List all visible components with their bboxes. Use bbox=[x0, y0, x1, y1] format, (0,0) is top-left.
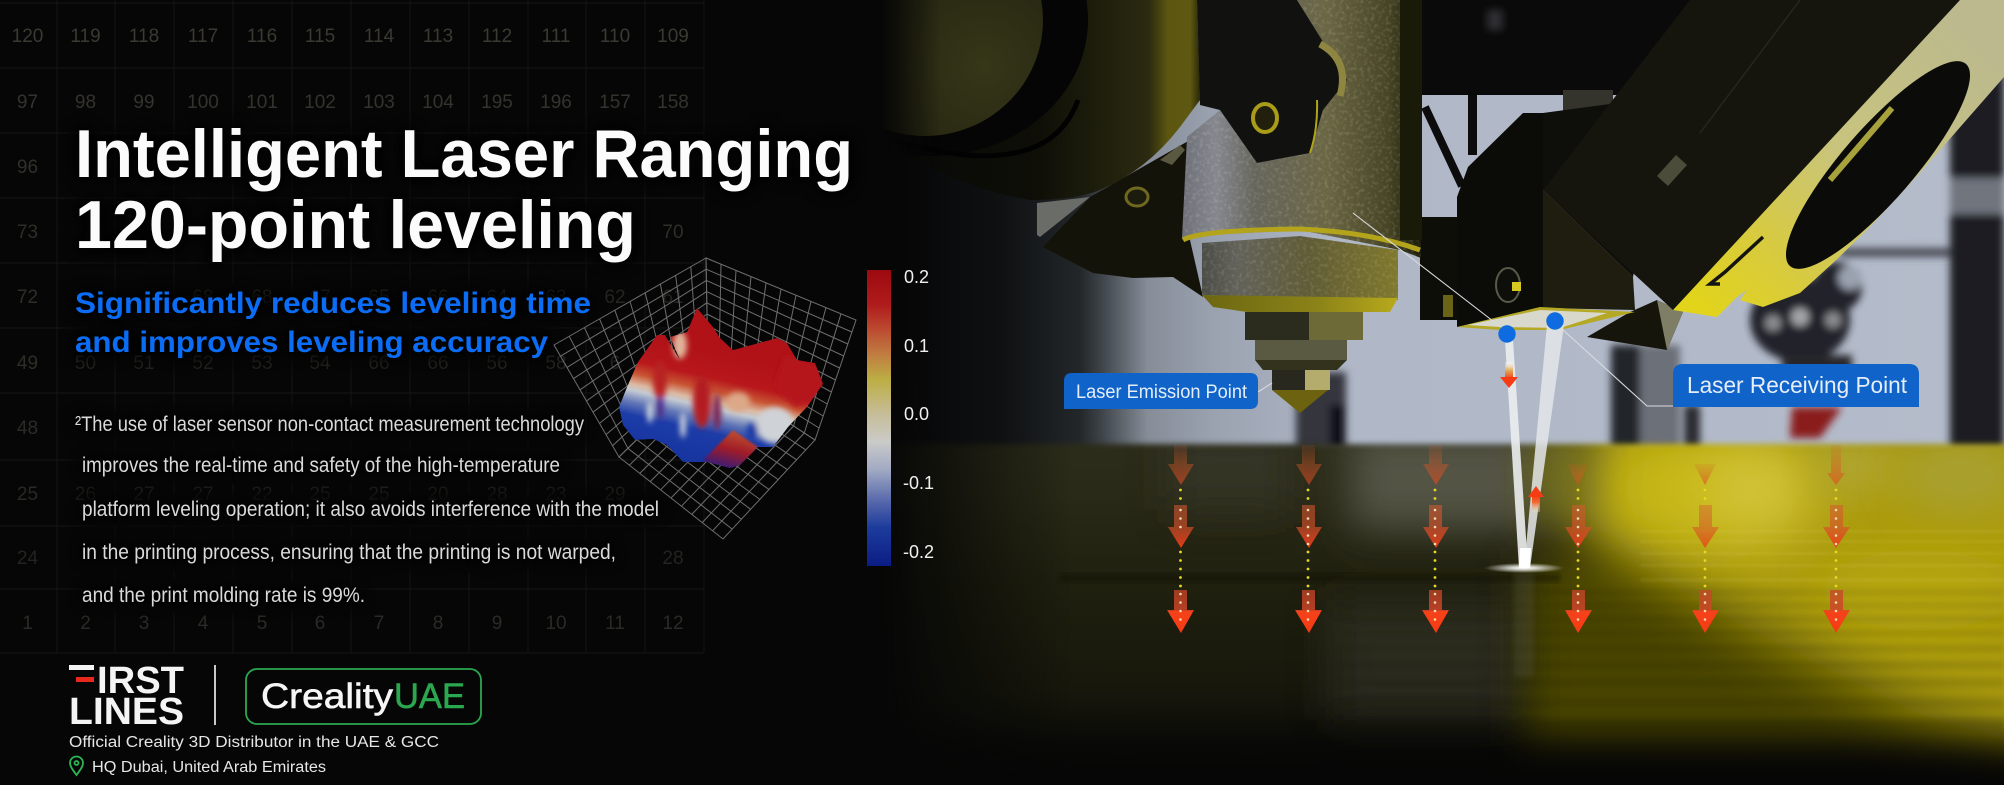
nozzle upper cylinder bbox=[1182, 0, 1421, 258]
grid row 97-158 bbox=[17, 92, 689, 113]
icon: location pin bbox=[70, 757, 83, 775]
logo: CrealityUAE bbox=[246, 669, 481, 724]
arrow column 5 bbox=[1692, 464, 1719, 633]
body text bbox=[75, 413, 659, 607]
laser spot glow bbox=[1484, 563, 1564, 573]
color scale labels: 0.1 bbox=[904, 336, 929, 356]
grid row 120-109: 114 bbox=[364, 26, 395, 47]
body text: ²The use of laser sensor non-contact measurement technology bbox=[75, 413, 584, 436]
grid row 73: 73 bbox=[17, 222, 38, 243]
cylinder end shadow bbox=[1400, 0, 1422, 240]
grid row 49: 49 bbox=[17, 353, 38, 374]
grid row 120-109: 119 bbox=[70, 26, 101, 47]
mesh left wall grid bbox=[554, 258, 708, 457]
arrow column 3 bbox=[1422, 445, 1449, 633]
title: 120-point leveling bbox=[75, 187, 636, 263]
arrow column 1 bbox=[1167, 445, 1194, 633]
grid row 1-12: 1 bbox=[22, 613, 33, 634]
grid row 25: 26 bbox=[75, 484, 96, 505]
body text: platform leveling operation; it also avoids interference with the model bbox=[82, 498, 659, 521]
callout: laser receiving point bbox=[1673, 364, 1919, 407]
subtitle: Significantly reduces leveling time bbox=[75, 287, 591, 320]
subtitle: and improves leveling accuracy bbox=[75, 326, 548, 359]
grid row 97-158: 103 bbox=[363, 92, 395, 113]
print bed floor bbox=[922, 440, 2004, 768]
arrow column 4 bbox=[1565, 464, 1592, 633]
grid row 72: 68 bbox=[251, 287, 273, 308]
left fade over photo bbox=[880, 0, 940, 440]
grid row 1-12: 2 bbox=[80, 613, 91, 634]
grid row 1-12: 3 bbox=[139, 613, 149, 634]
grid row 72: 65 bbox=[368, 287, 390, 308]
distributor tagline: Official Creality 3D Distributor in the UAE & GCC bbox=[69, 734, 439, 751]
leveling arrows grid bbox=[1167, 445, 1850, 633]
grid row 1-12: 5 bbox=[257, 613, 267, 634]
mesh right wall grid bbox=[706, 258, 856, 440]
color scale labels: -0.2 bbox=[903, 542, 934, 562]
grid row 72 bbox=[17, 287, 684, 308]
color scale labels: 0.2 bbox=[904, 267, 929, 287]
body text: and the print molding rate is 99%. bbox=[82, 584, 365, 607]
grid row 25: 25 bbox=[309, 484, 331, 505]
grid row 25: 25 bbox=[17, 484, 38, 505]
grid row 97-158: 104 bbox=[422, 92, 454, 113]
sensor block bbox=[1457, 90, 1683, 350]
grid row 73: 70 bbox=[662, 222, 684, 243]
grid row 97-158: 102 bbox=[304, 92, 336, 113]
grid row 97-158: 97 bbox=[17, 92, 38, 113]
color scale labels: 0.0 bbox=[904, 404, 929, 424]
grid row 49: 51 bbox=[133, 353, 155, 374]
grid row 97-158: 100 bbox=[187, 92, 219, 113]
dotted guide lines bbox=[1180, 490, 1836, 588]
grid row 97-158: 98 bbox=[75, 92, 96, 113]
grid row 72: 72 bbox=[17, 287, 38, 308]
grid row 120-109: 113 bbox=[423, 26, 453, 47]
grid row 120-109: 117 bbox=[188, 26, 218, 47]
grid row 97-158: 196 bbox=[540, 92, 572, 113]
color scale bar bbox=[867, 270, 891, 566]
title bbox=[75, 116, 853, 263]
grid row 120-109: 110 bbox=[600, 26, 630, 47]
grid row 1-12: 10 bbox=[545, 613, 567, 634]
grid row 48: 48 bbox=[17, 418, 38, 439]
grid row 25: 25 bbox=[368, 484, 390, 505]
logo: First Lines bbox=[69, 660, 184, 733]
grid row 49: 66 bbox=[368, 353, 390, 374]
arrow column 6 bbox=[1823, 445, 1850, 633]
grid row 72: 66 bbox=[427, 287, 449, 308]
grid row 49: 56 bbox=[486, 353, 508, 374]
grid row 1-12: 8 bbox=[433, 613, 443, 634]
grid row 120-109: 112 bbox=[482, 26, 512, 47]
grid row 1-12: 11 bbox=[605, 613, 625, 634]
laser beams bbox=[1484, 325, 1564, 573]
reflected laser column bbox=[1514, 572, 1534, 677]
grid row 120-109: 118 bbox=[129, 26, 159, 47]
grid row 72: 68 bbox=[192, 287, 214, 308]
nozzle black bracket bbox=[1197, 0, 1347, 163]
arrow column 2 bbox=[1295, 445, 1322, 633]
grid row 72: 61 bbox=[662, 287, 684, 308]
grid row 25: 29 bbox=[604, 484, 626, 505]
grid row 120-109: 116 bbox=[247, 26, 277, 47]
grid row 25: 28 bbox=[486, 484, 508, 505]
upper machine backdrop bbox=[1400, 0, 1720, 320]
grid row 1-12 bbox=[22, 613, 684, 634]
lower left bracket bbox=[1037, 140, 1203, 297]
grid row 24: 28 bbox=[662, 548, 684, 569]
color scale labels: -0.1 bbox=[903, 473, 934, 493]
grid row 97-158: 157 bbox=[599, 92, 631, 113]
logo: CrealityUAE: UAE bbox=[394, 677, 465, 716]
upper machine housing bbox=[894, 0, 1200, 200]
reflected up arrow on beam bbox=[1528, 486, 1544, 512]
grid row 1-12: 12 bbox=[662, 613, 684, 634]
callout: laser receiving point: Laser Receiving Point bbox=[1687, 372, 1908, 398]
3D leveling mesh chart bbox=[554, 258, 856, 539]
emission point dot bbox=[1498, 325, 1516, 343]
grid row 72: 64 bbox=[486, 287, 508, 308]
grid row 49: 6 bbox=[610, 353, 620, 374]
color scale labels bbox=[903, 267, 934, 562]
grid row 1-12: 4 bbox=[198, 613, 209, 634]
grid row 72: 63 bbox=[545, 287, 567, 308]
grid row 97-158: 101 bbox=[246, 92, 278, 113]
grid row 25: 22 bbox=[251, 484, 273, 505]
grid row 1-12: 9 bbox=[492, 613, 502, 634]
grid row 72: 62 bbox=[604, 287, 626, 308]
grid row 49 bbox=[17, 353, 620, 374]
callout connector lines bbox=[1258, 213, 1673, 406]
grid row 25: 27 bbox=[133, 484, 155, 505]
subtitle bbox=[75, 287, 591, 359]
grid row 73 bbox=[17, 222, 684, 243]
logo: CrealityUAE: Creality bbox=[261, 677, 394, 716]
grid row 96: 96 bbox=[17, 157, 38, 178]
grid row 120-109: 109 bbox=[657, 26, 689, 47]
grid row 25: 27 bbox=[192, 484, 214, 505]
number grid background bbox=[0, 0, 704, 653]
grid row 49: 50 bbox=[75, 353, 96, 374]
grid row 25: 23 bbox=[545, 484, 567, 505]
grid row 25 bbox=[17, 484, 626, 505]
yellow scanner plate bbox=[1543, 0, 2004, 317]
dots inside arrows bbox=[1180, 510, 1836, 620]
nozzle lower cylinder and tip bbox=[1183, 229, 1420, 413]
grid row 120-109: 111 bbox=[542, 26, 570, 47]
grid row 97-158: 99 bbox=[133, 92, 155, 113]
deviation surface bbox=[619, 308, 830, 470]
grid row 120-109: 115 bbox=[305, 26, 335, 47]
headquarters location: HQ Dubai, United Arab Emirates bbox=[92, 759, 326, 776]
grid row 120-109 bbox=[12, 26, 689, 47]
grid row 24: 24 bbox=[17, 548, 38, 569]
emission down arrow on beam bbox=[1500, 362, 1518, 388]
grid row 1-12: 6 bbox=[315, 613, 325, 634]
photo: laser sensor and nozzle over print bed bbox=[894, 0, 2004, 768]
grid row 72: 67 bbox=[309, 287, 331, 308]
grid row 97-158: 158 bbox=[657, 92, 689, 113]
grid row 49: 53 bbox=[251, 353, 273, 374]
metal surface texture bbox=[1182, 0, 1421, 258]
body text: improves the real-time and safety of the high-temperature bbox=[82, 454, 560, 477]
grid row 49: 66 bbox=[427, 353, 449, 374]
callout: laser emission point: Laser Emission Point bbox=[1076, 382, 1248, 403]
grid row 49: 58 bbox=[545, 353, 567, 374]
receiving point dot bbox=[1546, 312, 1564, 330]
grid row 49: 52 bbox=[192, 353, 214, 374]
logo divider bbox=[214, 665, 216, 725]
grid row 97-158: 195 bbox=[481, 92, 513, 113]
title: Intelligent Laser Ranging bbox=[75, 116, 853, 192]
logo: First Lines: LINES bbox=[69, 691, 184, 733]
grid row 120-109: 120 bbox=[12, 26, 43, 47]
grid row 1-12: 7 bbox=[374, 613, 384, 634]
logo: First Lines: IRST bbox=[97, 660, 184, 702]
body text: in the printing process, ensuring that the printing is not warped, bbox=[82, 541, 616, 564]
background wall bbox=[880, 0, 2004, 450]
grid row 25: 20 bbox=[427, 484, 449, 505]
callout: laser emission point bbox=[1064, 373, 1258, 409]
grid row 24 bbox=[17, 548, 684, 569]
grid row 49: 54 bbox=[309, 353, 331, 374]
mesh floor grid bbox=[619, 370, 815, 539]
